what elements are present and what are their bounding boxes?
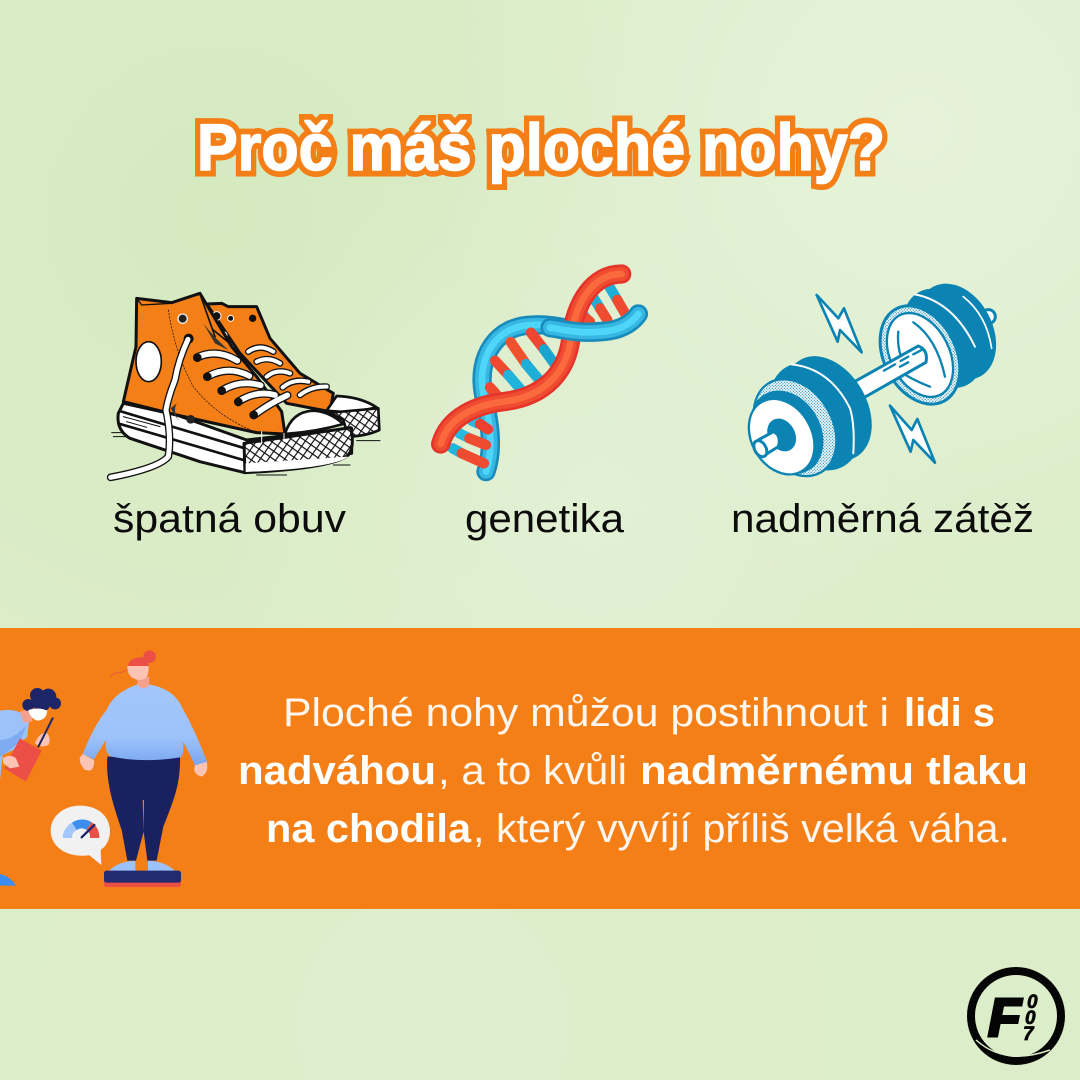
ground shadow — [112, 433, 380, 475]
bolts — [817, 295, 862, 352]
illustration: overweight person on scale with doctor — [0, 650, 207, 887]
title: Proč máš ploché nohy? — [197, 110, 885, 184]
blue strand — [482, 314, 638, 472]
panel: orange band — [0, 628, 1080, 909]
sweater — [83, 684, 207, 766]
label: nadměrná zátěž: nadměrná zátěž — [731, 497, 1034, 541]
speech bubble gauge — [51, 806, 110, 865]
icon: DNA helix — [441, 274, 638, 472]
body text: , a to kvůli — [438, 749, 627, 793]
laces — [197, 354, 287, 415]
left weight — [735, 341, 890, 491]
legs — [107, 757, 180, 861]
right weight — [864, 270, 1012, 418]
ankle patch — [136, 342, 161, 382]
logo: F007: F — [988, 988, 1023, 1048]
body text: lidi s — [904, 691, 995, 735]
logo: F007: 0 — [1025, 1008, 1036, 1029]
toe bumper — [244, 428, 352, 473]
logo: F007: 0 — [1027, 992, 1038, 1013]
body text — [238, 691, 1028, 851]
scale — [104, 861, 181, 887]
icon: dumbbell — [735, 270, 1012, 491]
red strand — [441, 274, 622, 444]
head — [137, 677, 149, 688]
blue strand overlap — [550, 314, 638, 332]
body text: , který vyvíjí příliš velká váha. — [473, 807, 1010, 851]
back sneaker — [207, 303, 379, 437]
toe cap — [285, 411, 343, 434]
label: genetika: genetika — [465, 497, 625, 541]
label: špatná obuv: špatná obuv — [113, 497, 346, 541]
loose lace — [111, 339, 188, 477]
base pairs — [453, 283, 626, 463]
icon: sneakers — [111, 293, 380, 477]
body text: nadváhou — [238, 749, 436, 793]
hands — [80, 754, 94, 771]
logo: F007: 7 — [1023, 1024, 1035, 1045]
bar — [853, 346, 926, 399]
logo: F007 — [971, 971, 1061, 1061]
body text: Ploché nohy můžou postihnout i — [283, 691, 889, 735]
doctor — [0, 688, 61, 886]
front sneaker — [111, 293, 380, 477]
body text: nadměrnému tlaku — [640, 749, 1028, 793]
body text: na chodila — [266, 807, 472, 851]
title: Proč máš ploché nohy? — [197, 110, 885, 184]
